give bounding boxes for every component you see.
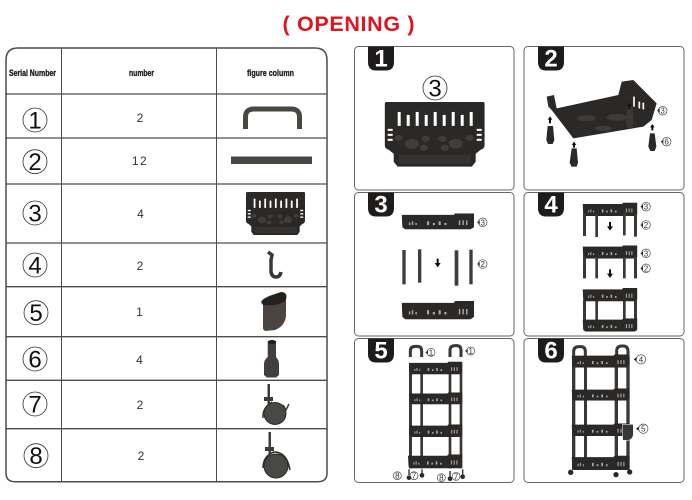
lower assembled tier: [583, 288, 637, 332]
callout 3: 3: [644, 203, 649, 212]
table frame and grid: [6, 48, 327, 482]
step badge 3: 3: [374, 192, 388, 218]
step badge 5: 5: [374, 338, 388, 364]
row 4: 2: [137, 259, 144, 273]
panel 6: [524, 338, 684, 482]
parts table: [6, 48, 327, 482]
callout 7: 7: [454, 472, 459, 481]
callout 8: 8: [439, 474, 444, 483]
step badge 2: 2: [544, 46, 558, 72]
row 2: [23, 149, 312, 176]
row 1: 1: [28, 108, 42, 134]
row 7: 7: [28, 392, 42, 418]
callout 3: 3: [660, 107, 665, 116]
callout 1: 1: [429, 348, 434, 357]
callout 3: [423, 76, 447, 102]
callout 6: 6: [664, 138, 669, 147]
step badge 6: [538, 338, 564, 364]
callout 2: 2: [644, 221, 649, 230]
callout 3: 3: [644, 249, 649, 258]
row 6: 6: [28, 346, 42, 374]
top basket: [402, 213, 474, 229]
bottom basket: [402, 301, 474, 319]
row 5: 5: [29, 300, 43, 327]
poles: [402, 249, 473, 286]
casters: [568, 469, 632, 477]
basket: [385, 102, 485, 167]
arrow down: [435, 259, 441, 267]
arrow down: [607, 222, 613, 231]
row 8: 8: [29, 443, 43, 470]
callout 1: 1: [468, 347, 473, 356]
panel 4: [524, 192, 684, 336]
row 3: [23, 192, 305, 235]
arrow down: [607, 269, 613, 278]
row 8: 2: [138, 449, 145, 463]
row 3: 4: [137, 207, 144, 221]
step badge 1: [368, 46, 394, 72]
handles: [410, 346, 461, 357]
handles: [574, 346, 628, 358]
callout 4: 4: [639, 355, 644, 364]
row 6: 4: [136, 353, 143, 367]
row 4: 4: [28, 252, 42, 280]
shelves: [408, 362, 462, 468]
row 2: 12: [132, 154, 148, 168]
step badge 1: 1: [374, 46, 388, 72]
casters: [407, 469, 465, 481]
step badge 6: 6: [544, 338, 558, 364]
rack frame: [409, 363, 462, 468]
panel 5: [354, 338, 514, 483]
callout 2: 2: [644, 264, 649, 273]
table header: [9, 68, 294, 79]
title: ( OPENING ): [282, 12, 414, 36]
panel 1: [354, 46, 514, 190]
callout 3: 3: [428, 76, 442, 102]
step badge 5: [368, 338, 394, 364]
table header: figure column: [247, 68, 294, 79]
table header: number: [129, 68, 154, 79]
step badge 2: [538, 46, 564, 72]
row 5: [24, 292, 286, 331]
step badge 4: [538, 192, 564, 218]
row 8: [24, 432, 290, 478]
row 7: [23, 384, 289, 424]
side bin: [622, 424, 633, 440]
middle tier: [583, 245, 637, 278]
panel 2: [524, 46, 684, 190]
assembly arrows: [548, 103, 655, 148]
table header: Serial Number: [9, 68, 56, 79]
row 5: 1: [136, 305, 143, 319]
row 6: [23, 340, 279, 378]
row 4: [23, 252, 281, 280]
shelves: [572, 354, 630, 470]
panel 3: [354, 192, 514, 336]
row 1: 2: [137, 111, 144, 125]
row 1: [23, 108, 300, 134]
upper tier: [583, 203, 637, 237]
step badge 3: [368, 192, 394, 218]
row 7: 2: [137, 398, 144, 412]
basket with feet: [546, 80, 671, 167]
row 2: 2: [28, 149, 42, 176]
callout 2: 2: [480, 260, 485, 269]
callout 5: 5: [641, 425, 646, 434]
rack frame: [572, 357, 630, 470]
row 3: 3: [28, 200, 42, 228]
callout 8: 8: [395, 472, 400, 481]
callout 7: 7: [412, 472, 417, 481]
step badge 4: 4: [544, 192, 558, 218]
callout 3: 3: [480, 218, 485, 227]
